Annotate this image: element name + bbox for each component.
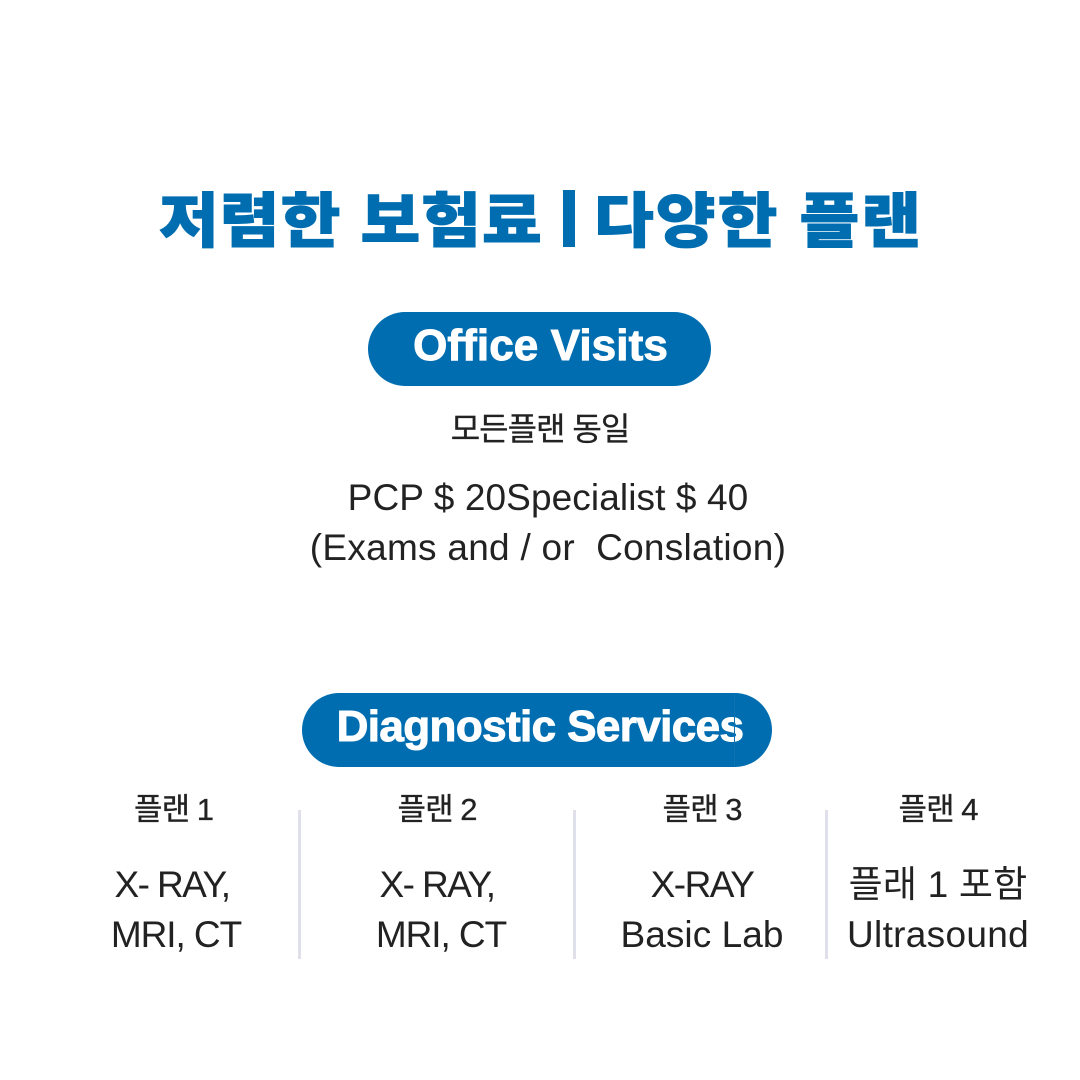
plan 3 column [621, 792, 783, 955]
office visit copay text [310, 477, 786, 568]
office visit copay text: PCP $ 20Specialist $ 40 [348, 477, 748, 518]
plan 4 services: 플래 1 포함 [849, 864, 1027, 905]
plan 1 services: X- RAY, [115, 864, 229, 905]
plan 3 services: Basic Lab [621, 914, 783, 955]
plan 2 column [376, 792, 506, 955]
title [159, 188, 923, 255]
plan 4 services [847, 864, 1029, 955]
plan 2 services: X- RAY, [380, 864, 494, 905]
plan 3 label: 플랜 3 [663, 792, 741, 827]
plan 3 services: X-RAY [651, 864, 753, 905]
plan 3 services [621, 864, 783, 955]
plan 1 services: MRI, CT [111, 914, 241, 955]
plan 1 column [111, 792, 242, 955]
office visit copay text: (Exams and / or Conslation) [310, 527, 786, 568]
title separator bar [563, 190, 575, 247]
plan 2 services: MRI, CT [376, 914, 506, 955]
plan 1 services [111, 864, 242, 955]
pill heading: Diagnostic Services [302, 693, 772, 767]
title separator bar: | [566, 207, 572, 229]
plan 2 label: 플랜 2 [398, 792, 476, 827]
pill heading: Diagnostic Services: Diagnostic Services [337, 702, 743, 751]
plan 4 services: Ultrasound [847, 914, 1029, 955]
plan 1 label: 플랜 1 [134, 792, 213, 827]
pill heading: Office Visits: Office Visits [413, 321, 668, 370]
plan 4 column [847, 792, 1029, 955]
pill heading: Office Visits [368, 312, 711, 386]
title part: affordable premiums: 저렴한 보험료 [159, 188, 543, 255]
plan 4 label: 플랜 4 [899, 792, 977, 827]
subheading: same for all plans: 모든플랜 동일 [451, 411, 629, 447]
plan 2 services [376, 864, 506, 955]
title part: various plans: 다양한 플랜 [594, 188, 923, 255]
